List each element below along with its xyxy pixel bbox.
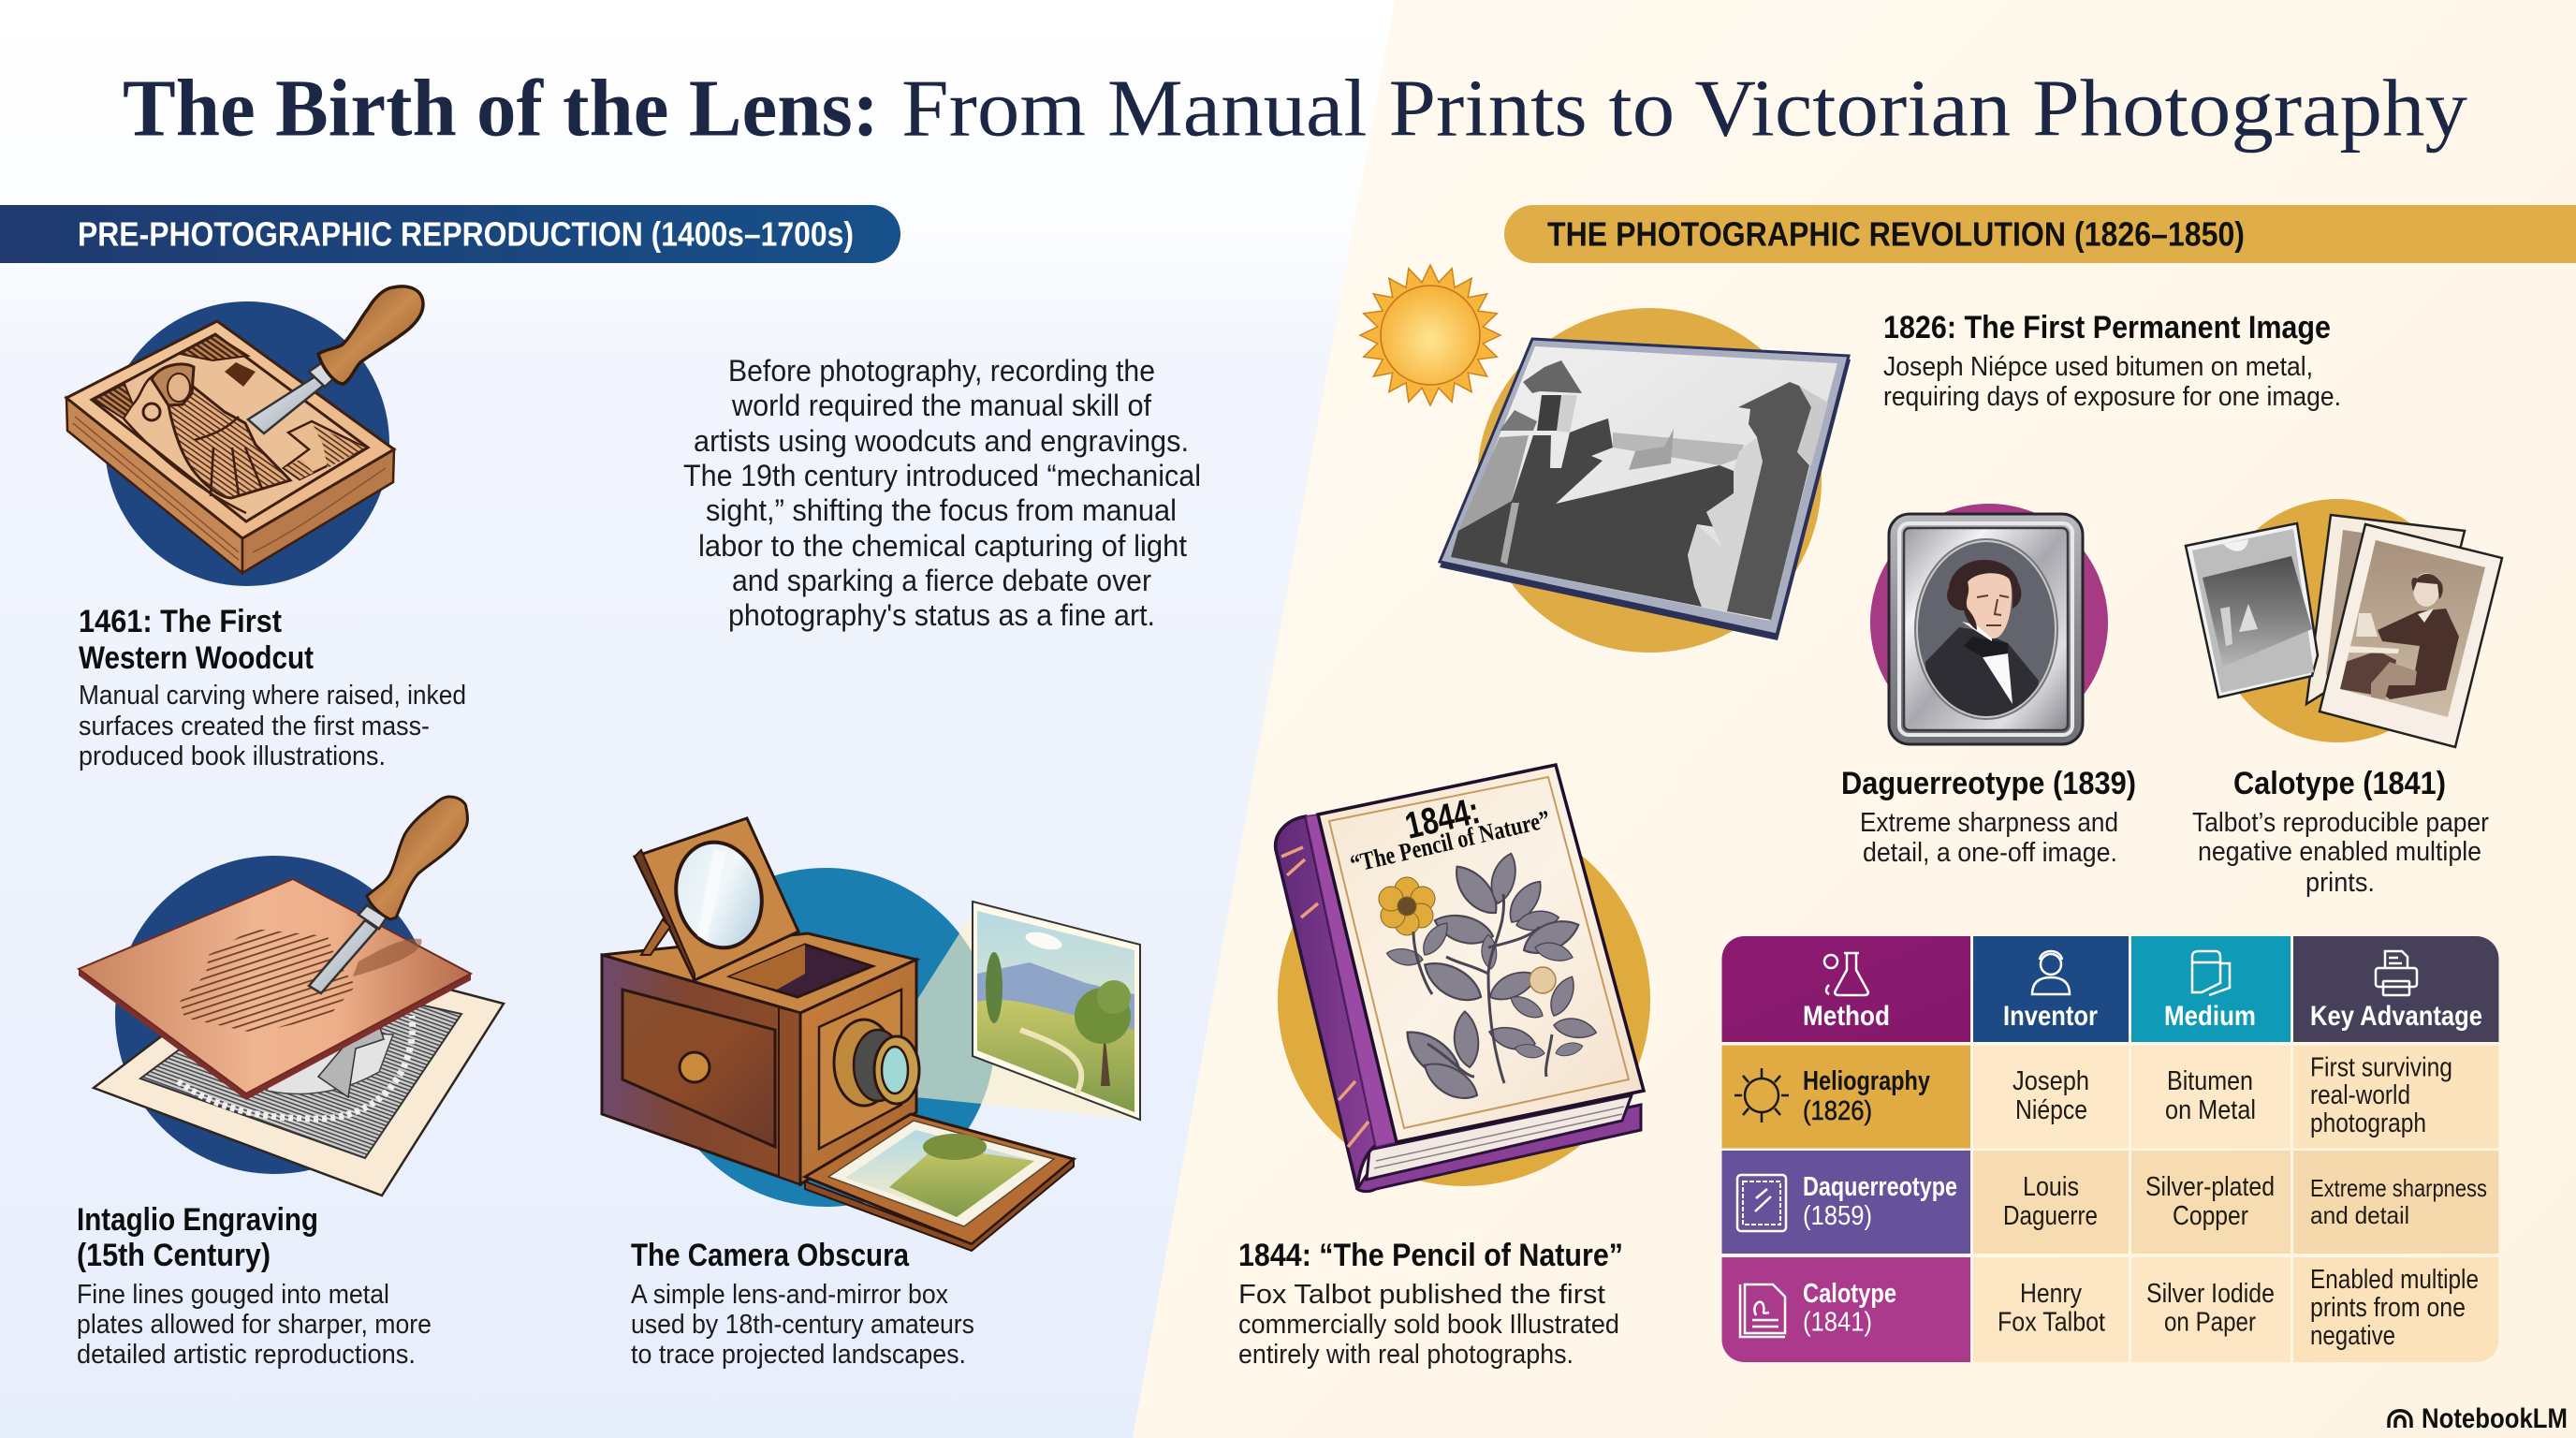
description: Talbot’s reproducible paper (2192, 808, 2489, 838)
row: calotype: (1841) (1803, 1307, 1872, 1337)
icon: sun (1734, 1068, 1789, 1123)
section banner: pre-photographic: PRE-PHOTOGRAPHIC REPRODUCTION (1400s–1700s) (78, 215, 854, 253)
row: calotype: on Paper (2164, 1307, 2256, 1337)
heading: The Camera Obscura (631, 1238, 910, 1273)
panel: pencil of nature (1238, 765, 1650, 1370)
section banner: photographic revolution (1504, 205, 2576, 263)
description: commercially sold book Illustrated (1238, 1310, 1619, 1340)
panel: woodcut (66, 286, 466, 771)
panel: camera obscura (602, 818, 1140, 1370)
icon: open botanical book: “The Pencil of Nature” (1348, 805, 1553, 878)
row: calotype: Enabled multiple (2310, 1265, 2479, 1295)
row: daguerreotype: Daquerreotype (1803, 1172, 1957, 1202)
description: produced book illustrations. (79, 741, 386, 771)
description: requiring days of exposure for one image. (1883, 382, 2341, 412)
row: calotype: negative (2310, 1321, 2395, 1351)
row: heliography: Niépce (2015, 1095, 2087, 1125)
intro text block: photography's status as a fine art. (728, 598, 1155, 632)
description: detailed artistic reproductions. (77, 1340, 416, 1370)
icon: documents (2192, 951, 2230, 995)
panel: 1826 first permanent image (1360, 265, 2341, 653)
row: daguerreotype (1722, 1151, 2499, 1254)
description (631, 1280, 974, 1370)
row: daguerreotype: Daguerre (2003, 1201, 2098, 1231)
row: daguerreotype: Louis (2023, 1172, 2079, 1202)
intro text block: Before photography, recording the (728, 354, 1155, 388)
description: used by 18th-century amateurs (631, 1310, 974, 1340)
intro text block: sight,” shifting the focus from manual (706, 493, 1177, 527)
row: daguerreotype: Silver-plated (2145, 1172, 2275, 1202)
section banner: photographic revolution: THE PHOTOGRAPHIC REVOLUTION (1826–1850) (1547, 215, 2245, 253)
description: plates allowed for sharper, more (77, 1310, 432, 1340)
heading: 1844: “The Pencil of Nature” (1238, 1238, 1623, 1273)
description: entirely with real photographs. (1238, 1340, 1573, 1370)
icon: inventor (2032, 951, 2070, 994)
heading: Intaglio Engraving (77, 1202, 318, 1238)
table header row: Medium (2164, 1001, 2256, 1032)
icon: gold flower (1379, 877, 1435, 935)
description (1238, 1280, 1619, 1370)
row: calotype: Silver Iodide (2146, 1279, 2275, 1309)
heading: Western Woodcut (79, 640, 314, 676)
panel: intaglio engraving (77, 797, 504, 1370)
heading: 1826: The First Permanent Image (1883, 310, 2331, 345)
title (123, 62, 2468, 154)
section banner: pre-photographic (0, 205, 900, 263)
row: heliography: Bitumen (2167, 1066, 2253, 1096)
description: to trace projected landscapes. (631, 1340, 966, 1370)
icon: flask (1824, 953, 1868, 995)
row: calotype: Henry (2020, 1279, 2083, 1309)
row: calotype (1722, 1257, 2499, 1362)
row: heliography: Heliography (1803, 1066, 1930, 1096)
row: daguerreotype: Copper (2173, 1201, 2248, 1231)
description (79, 681, 466, 771)
row: heliography: Joseph (2012, 1066, 2089, 1096)
icon: paper negative and prints (2186, 499, 2502, 747)
description: detail, a one-off image. (1863, 838, 2117, 868)
icon: framed plate (1737, 1175, 1786, 1231)
heading (77, 1202, 318, 1273)
table header row: Key Advantage (2310, 1001, 2482, 1032)
table header row: Inventor (2003, 1001, 2098, 1032)
row: heliography: (1826) (1803, 1096, 1872, 1126)
icon: camera obscura box with projected landscape (602, 818, 1140, 1251)
row: heliography: First surviving (2310, 1052, 2452, 1082)
heading: Daguerreotype (1839) (1841, 766, 2136, 801)
icon: open botanical book: 1844: (1401, 790, 1484, 847)
icon: chisel (248, 286, 423, 433)
description (1883, 352, 2341, 412)
icon: copper plate, print and chisel (79, 797, 504, 1196)
description: A simple lens-and-mirror box (631, 1280, 948, 1310)
description (77, 1280, 432, 1370)
row: calotype: prints from one (2310, 1293, 2466, 1323)
table header row (1722, 936, 2499, 1042)
description: Fine lines gouged into metal (77, 1280, 389, 1310)
row: heliography: on Metal (2165, 1095, 2256, 1125)
intro text block: world required the manual skill of (731, 389, 1151, 422)
table header row: Method (1803, 1001, 1890, 1032)
title: The Birth of the Lens: (123, 62, 879, 154)
icon: chisel (309, 797, 468, 993)
description: Fox Talbot published the first (1238, 1280, 1605, 1310)
intro text block: labor to the chemical capturing of light (698, 529, 1187, 563)
panel: daguerreotype (1841, 504, 2136, 868)
comparison table (1722, 936, 2499, 1362)
heading: (15th Century) (77, 1238, 271, 1273)
icon: paper document (1740, 1284, 1785, 1337)
description: prints. (2305, 868, 2375, 898)
row: calotype: Calotype (1803, 1279, 1896, 1309)
description: negative enabled multiple (2198, 837, 2481, 867)
icon: open botanical book (1276, 765, 1650, 1192)
intro text block: and sparking a fierce debate over (732, 564, 1151, 597)
row: daguerreotype: and detail (2310, 1201, 2409, 1229)
description (2192, 808, 2489, 898)
description: Joseph Niépce used bitumen on metal, (1883, 352, 2313, 382)
description: Extreme sharpness and (1860, 808, 2118, 838)
row: daguerreotype: Extreme sharpness (2310, 1174, 2487, 1202)
row: calotype: Fox Talbot (1998, 1307, 2105, 1337)
row: heliography (1722, 1045, 2499, 1148)
heading (79, 604, 314, 676)
intro text block: The 19th century introduced “mechanical (683, 459, 1201, 492)
heading: 1461: The First (79, 604, 282, 639)
description: Manual carving where raised, inked (79, 681, 466, 711)
intro text block: artists using woodcuts and engravings. (694, 424, 1189, 458)
icon: printer (2376, 951, 2417, 995)
icon: silver framed portrait (1870, 504, 2108, 744)
description (1860, 808, 2118, 868)
row: heliography: real-world (2310, 1080, 2410, 1110)
panel: calotype (2186, 499, 2502, 898)
icon: carved woodblock and chisel (66, 286, 423, 586)
heading: Calotype (1841) (2233, 766, 2446, 801)
row: daguerreotype: (1859) (1803, 1201, 1872, 1231)
icon: heliograph plate with sun (1360, 265, 1851, 653)
intro text block (683, 354, 1201, 632)
description: surfaces created the first mass- (79, 712, 430, 741)
title: From Manual Prints to Victorian Photography (901, 62, 2468, 154)
row: heliography: photograph (2310, 1108, 2426, 1138)
